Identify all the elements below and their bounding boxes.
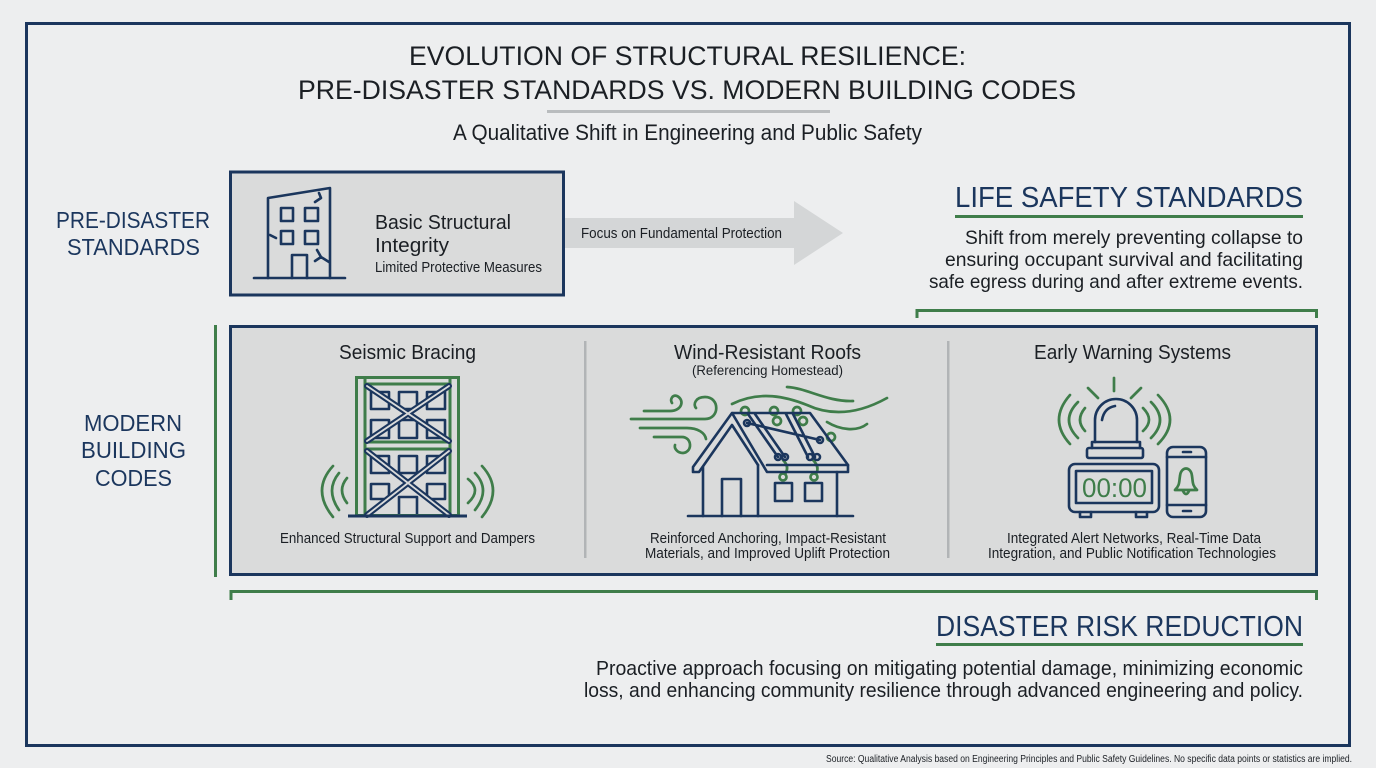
text: basic structural integrity: Basic Structural xyxy=(375,212,511,234)
text: basic structural integrity: Integrity xyxy=(375,235,449,257)
text: disaster risk reduction description xyxy=(584,657,1303,702)
panel: pre-disaster standards xyxy=(230,172,564,295)
row label: modern building codes: BUILDING xyxy=(81,437,186,463)
text: basic structural integrity: Limited Protective Measures xyxy=(375,260,542,276)
arrow: focus on fundamental protection: Focus on Fundamental Protection xyxy=(581,226,782,242)
column: early warning systems: Integration, and Public Notification Technologies xyxy=(988,546,1276,562)
text: disaster risk reduction description: loss, and enhancing community resilience through advanced engineering and policy. xyxy=(584,679,1303,702)
column: seismic bracing: Enhanced Structural Support and Dampers xyxy=(280,531,535,547)
heading: life safety standards: LIFE SAFETY STANDARDS xyxy=(955,182,1303,214)
title: PRE-DISASTER STANDARDS VS. MODERN BUILDING CODES xyxy=(298,75,1076,105)
icon: cracked building xyxy=(254,188,345,278)
text: life safety description xyxy=(929,227,1303,293)
column: seismic bracing: Seismic Bracing xyxy=(339,342,476,364)
row label: pre-disaster standards xyxy=(56,207,210,260)
icon: siren, clock and phone xyxy=(1059,378,1206,517)
panel: modern building codes xyxy=(230,326,1316,574)
column: early warning systems xyxy=(988,342,1276,562)
column: wind-resistant roofs xyxy=(631,342,890,562)
subtitle: A Qualitative Shift in Engineering and Public Safety xyxy=(453,120,922,145)
icon: house with anchored roof and wind xyxy=(631,387,887,516)
row label: pre-disaster standards: PRE-DISASTER xyxy=(56,207,210,233)
text: life safety description: ensuring occupant survival and facilitating xyxy=(945,249,1303,271)
column: wind-resistant roofs: Materials, and Improved Uplift Protection xyxy=(645,546,890,562)
icon: braced frame xyxy=(322,378,493,517)
column: early warning systems: Early Warning Systems xyxy=(1034,342,1231,364)
column: seismic bracing xyxy=(280,342,535,547)
arrow: focus on fundamental protection xyxy=(565,201,843,265)
column: wind-resistant roofs: (Referencing Homestead) xyxy=(692,363,843,378)
row label: modern building codes: CODES xyxy=(95,465,172,491)
row label: modern building codes: MODERN xyxy=(84,410,182,436)
column: early warning systems: Integrated Alert Networks, Real-Time Data xyxy=(1007,531,1262,547)
text: life safety description: safe egress during and after extreme events. xyxy=(929,271,1303,293)
heading: disaster risk reduction: DISASTER RISK REDUCTION xyxy=(936,611,1303,643)
icon: siren, clock and phone: 00:00 xyxy=(1082,473,1147,503)
row label: modern building codes xyxy=(81,410,186,491)
row label: pre-disaster standards: STANDARDS xyxy=(67,234,200,260)
column: wind-resistant roofs: Reinforced Anchoring, Impact-Resistant xyxy=(650,531,886,547)
title xyxy=(298,41,1076,105)
text: life safety description: Shift from merely preventing collapse to xyxy=(965,227,1303,249)
text: basic structural integrity xyxy=(375,212,542,276)
title: EVOLUTION OF STRUCTURAL RESILIENCE: xyxy=(409,41,966,71)
column: wind-resistant roofs: Wind-Resistant Roofs xyxy=(674,342,861,364)
text: disaster risk reduction description: Proactive approach focusing on mitigating potential damage, minimizing economic xyxy=(596,657,1303,680)
